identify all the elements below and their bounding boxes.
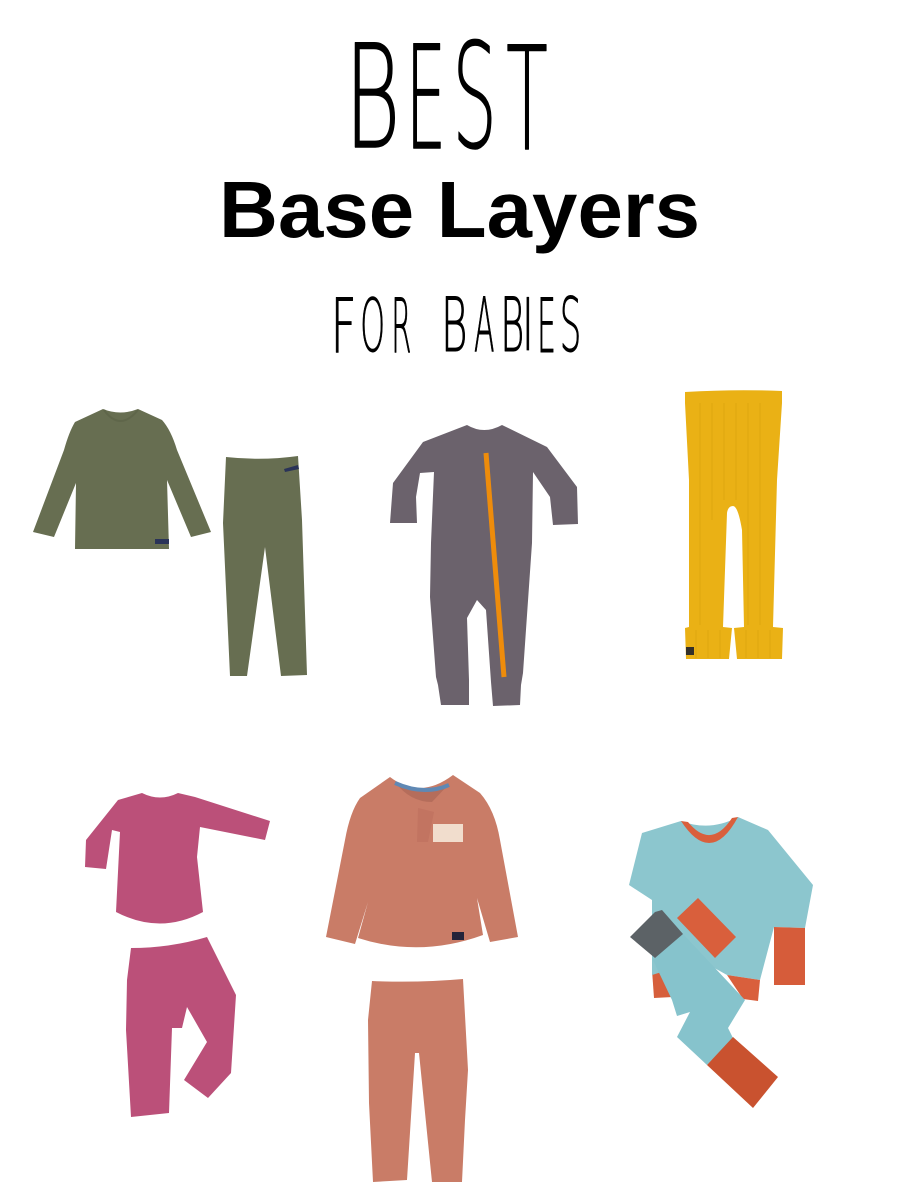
subtitle: FOR BABIES: I <box>522 283 534 367</box>
pink top <box>85 793 270 924</box>
shirt collar <box>104 410 138 421</box>
grey waistband <box>630 910 683 958</box>
product: terracotta henley and leggings <box>326 775 518 1182</box>
title: BEST <box>345 12 548 183</box>
terracotta leggings <box>368 979 468 1182</box>
orange zipper <box>486 453 504 677</box>
pink pants <box>126 937 236 1117</box>
orange left cuff <box>677 898 736 958</box>
subtitle: FOR BABIES: E <box>537 284 556 370</box>
right orange hem <box>727 975 760 1001</box>
blue collar <box>395 783 449 790</box>
subtitle: FOR BABIES: F <box>331 283 356 370</box>
subtitle: FOR BABIES: R <box>391 283 411 370</box>
subtitle: FOR BABIES: S <box>560 281 581 369</box>
neck opening <box>395 782 449 802</box>
rib lines <box>696 403 770 658</box>
title: BEST: S <box>452 12 497 181</box>
placket <box>417 808 434 842</box>
leggings label <box>284 465 299 472</box>
cuff tag <box>686 647 694 655</box>
orange ankle cuff <box>707 1037 778 1108</box>
orange right cuff <box>774 927 805 985</box>
product: grey zip romper with orange zipper <box>390 425 578 706</box>
subtitle: FOR BABIES: A <box>474 283 495 369</box>
subtitle: FOR BABIES: B <box>500 281 524 369</box>
olive leggings <box>223 456 307 676</box>
left hem panel <box>652 970 673 998</box>
product: yellow ribbed leggings <box>685 390 783 659</box>
product: olive shirt and leggings <box>33 409 307 676</box>
subtitle: FOR BABIES <box>331 281 581 370</box>
subtitle: FOR BABIES: B <box>441 283 468 370</box>
title: BEST: B <box>345 14 400 181</box>
title: BEST: T <box>506 17 548 183</box>
henley top <box>326 775 518 947</box>
product: blue and orange colour-block set <box>629 817 813 1108</box>
shirt label <box>155 539 169 544</box>
product: pink top and pants <box>85 793 270 1117</box>
leggings body <box>685 390 783 659</box>
olive shirt <box>33 409 211 549</box>
romper body <box>390 425 578 706</box>
blue pants <box>653 934 745 1065</box>
title: BEST: E <box>406 16 446 183</box>
orange collar <box>681 817 738 843</box>
subtitle: FOR BABIES: O <box>360 285 385 369</box>
blue top <box>629 817 813 980</box>
heading: Base Layers: Base Layers <box>219 165 700 254</box>
chest graphic <box>433 824 463 842</box>
hem label <box>452 932 464 940</box>
